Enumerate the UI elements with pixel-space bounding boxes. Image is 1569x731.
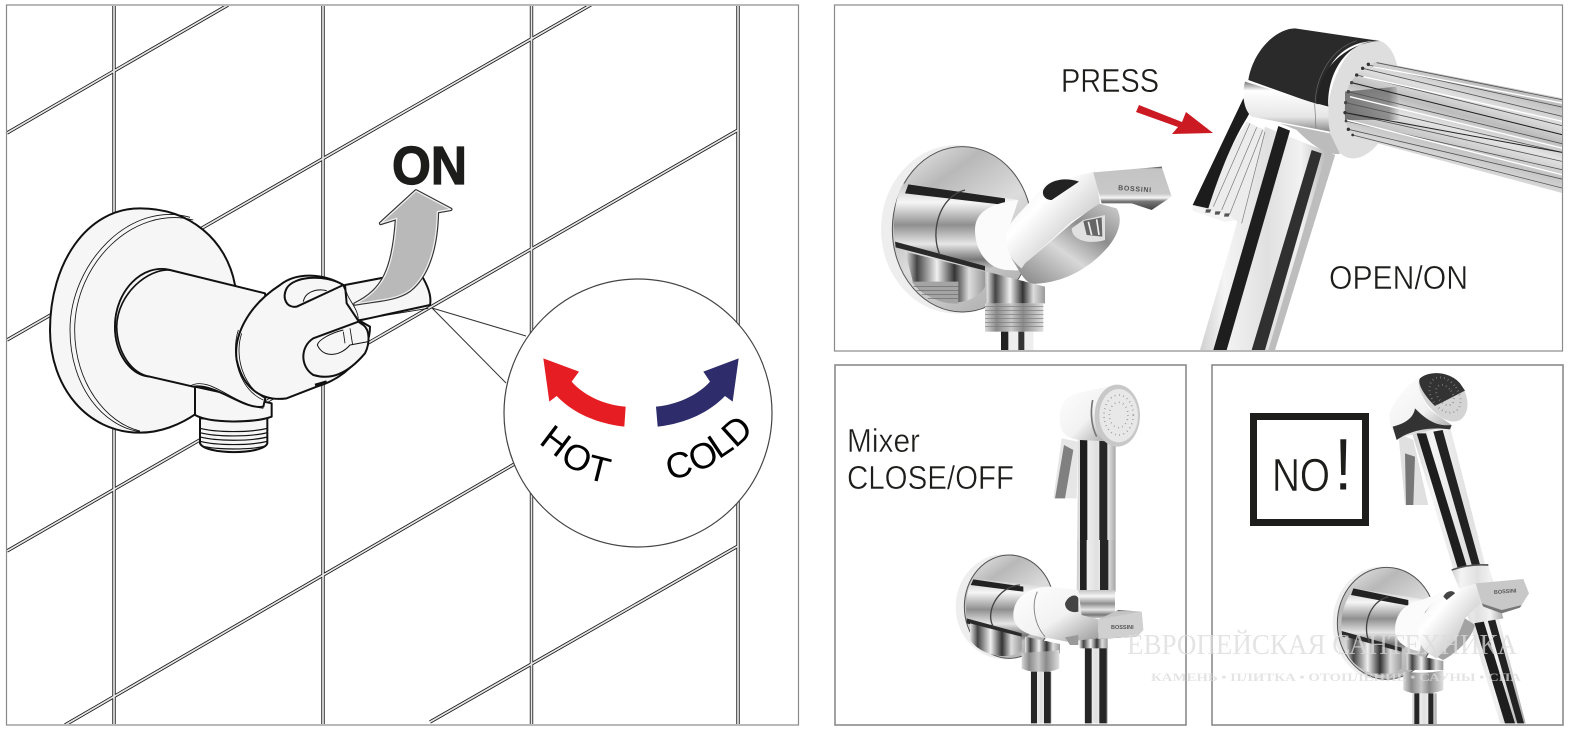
dark top <box>1248 28 1380 105</box>
label: HOT <box>533 417 615 491</box>
warning box: NO! <box>1254 416 1366 522</box>
ball swivel <box>236 276 370 399</box>
label: COLD: O <box>682 431 724 480</box>
lower slot <box>303 322 369 377</box>
callout lines <box>432 308 526 383</box>
wall plate <box>50 208 263 433</box>
label: HOT: O <box>556 433 598 482</box>
panel: do not do this <box>1212 365 1563 725</box>
stem <box>1200 127 1335 350</box>
label: Mixer CLOSE/OFF <box>847 422 1014 496</box>
icon: hand shower tilted <box>1389 372 1526 723</box>
panel: press trigger to open <box>834 5 1563 352</box>
elbow body <box>894 183 1018 270</box>
thread <box>200 418 267 452</box>
warning box: NO!: NO <box>1272 449 1330 501</box>
text: BOSSINI on lever: BOSSINI <box>1118 185 1151 194</box>
neck <box>1280 123 1340 154</box>
trigger <box>1193 122 1265 225</box>
watermark: ЕВРОПЕЙСКАЯ САНТЕХНИКА <box>1127 629 1517 661</box>
turn arrow <box>355 191 451 304</box>
nipple <box>195 387 272 421</box>
lever head <box>1093 167 1172 210</box>
upper slot <box>285 278 343 307</box>
label: Mixer CLOSE/OFF: CLOSE/OFF <box>847 459 1014 496</box>
arrow: hot <box>543 358 626 427</box>
lever arm <box>1006 172 1100 268</box>
label: COLD: C <box>661 442 697 488</box>
arrow: press <box>1136 105 1213 134</box>
lever <box>345 276 430 321</box>
swivel ball <box>975 200 1022 271</box>
label: HOT: H <box>533 417 579 465</box>
icon: mixer with lever swung out <box>1333 565 1529 724</box>
icon: hand shower upright <box>1053 385 1140 592</box>
label: OPEN/ON: OPEN/ON <box>1329 259 1468 296</box>
label: COLD <box>661 407 760 488</box>
label: PRESS: PRESS <box>1061 62 1159 99</box>
tile grid <box>7 3 738 725</box>
watermark <box>1127 629 1521 684</box>
nut behind plate <box>905 252 985 302</box>
chrome band <box>1243 82 1330 132</box>
icon: mixer with holder closed <box>956 540 1143 723</box>
lower disc <box>1007 203 1120 284</box>
panel: mixer closed <box>835 365 1186 725</box>
watermark: КАМЕНЬ • ПЛИТКА • ОТОПЛЕНИЕ • САУНЫ • СПА <box>1151 670 1521 684</box>
icon: line drawing of wall mixer <box>50 191 451 452</box>
icon: hand shower with trigger pressed <box>1193 28 1380 350</box>
arrow: cold <box>656 358 739 427</box>
text: BOSSINI on holder: BOSSINI <box>1111 625 1134 631</box>
heading: ON: ON <box>392 136 467 196</box>
elbow body <box>115 269 273 407</box>
icon: mixer with lever open <box>881 145 1172 352</box>
label: Mixer CLOSE/OFF: Mixer <box>847 422 920 459</box>
callout circle: hot and cold <box>504 279 772 547</box>
nipple and thread <box>987 272 1045 303</box>
label: COLD: D <box>713 407 760 455</box>
label: COLD: L <box>700 421 740 466</box>
panel: line drawing of mixer on tiled wall <box>6 3 798 725</box>
text: BOSSINI on holder: BOSSINI <box>1494 588 1517 596</box>
spray of water <box>1316 32 1563 193</box>
label: HOT: T <box>583 446 615 491</box>
warning box: NO!: ! <box>1333 423 1354 506</box>
